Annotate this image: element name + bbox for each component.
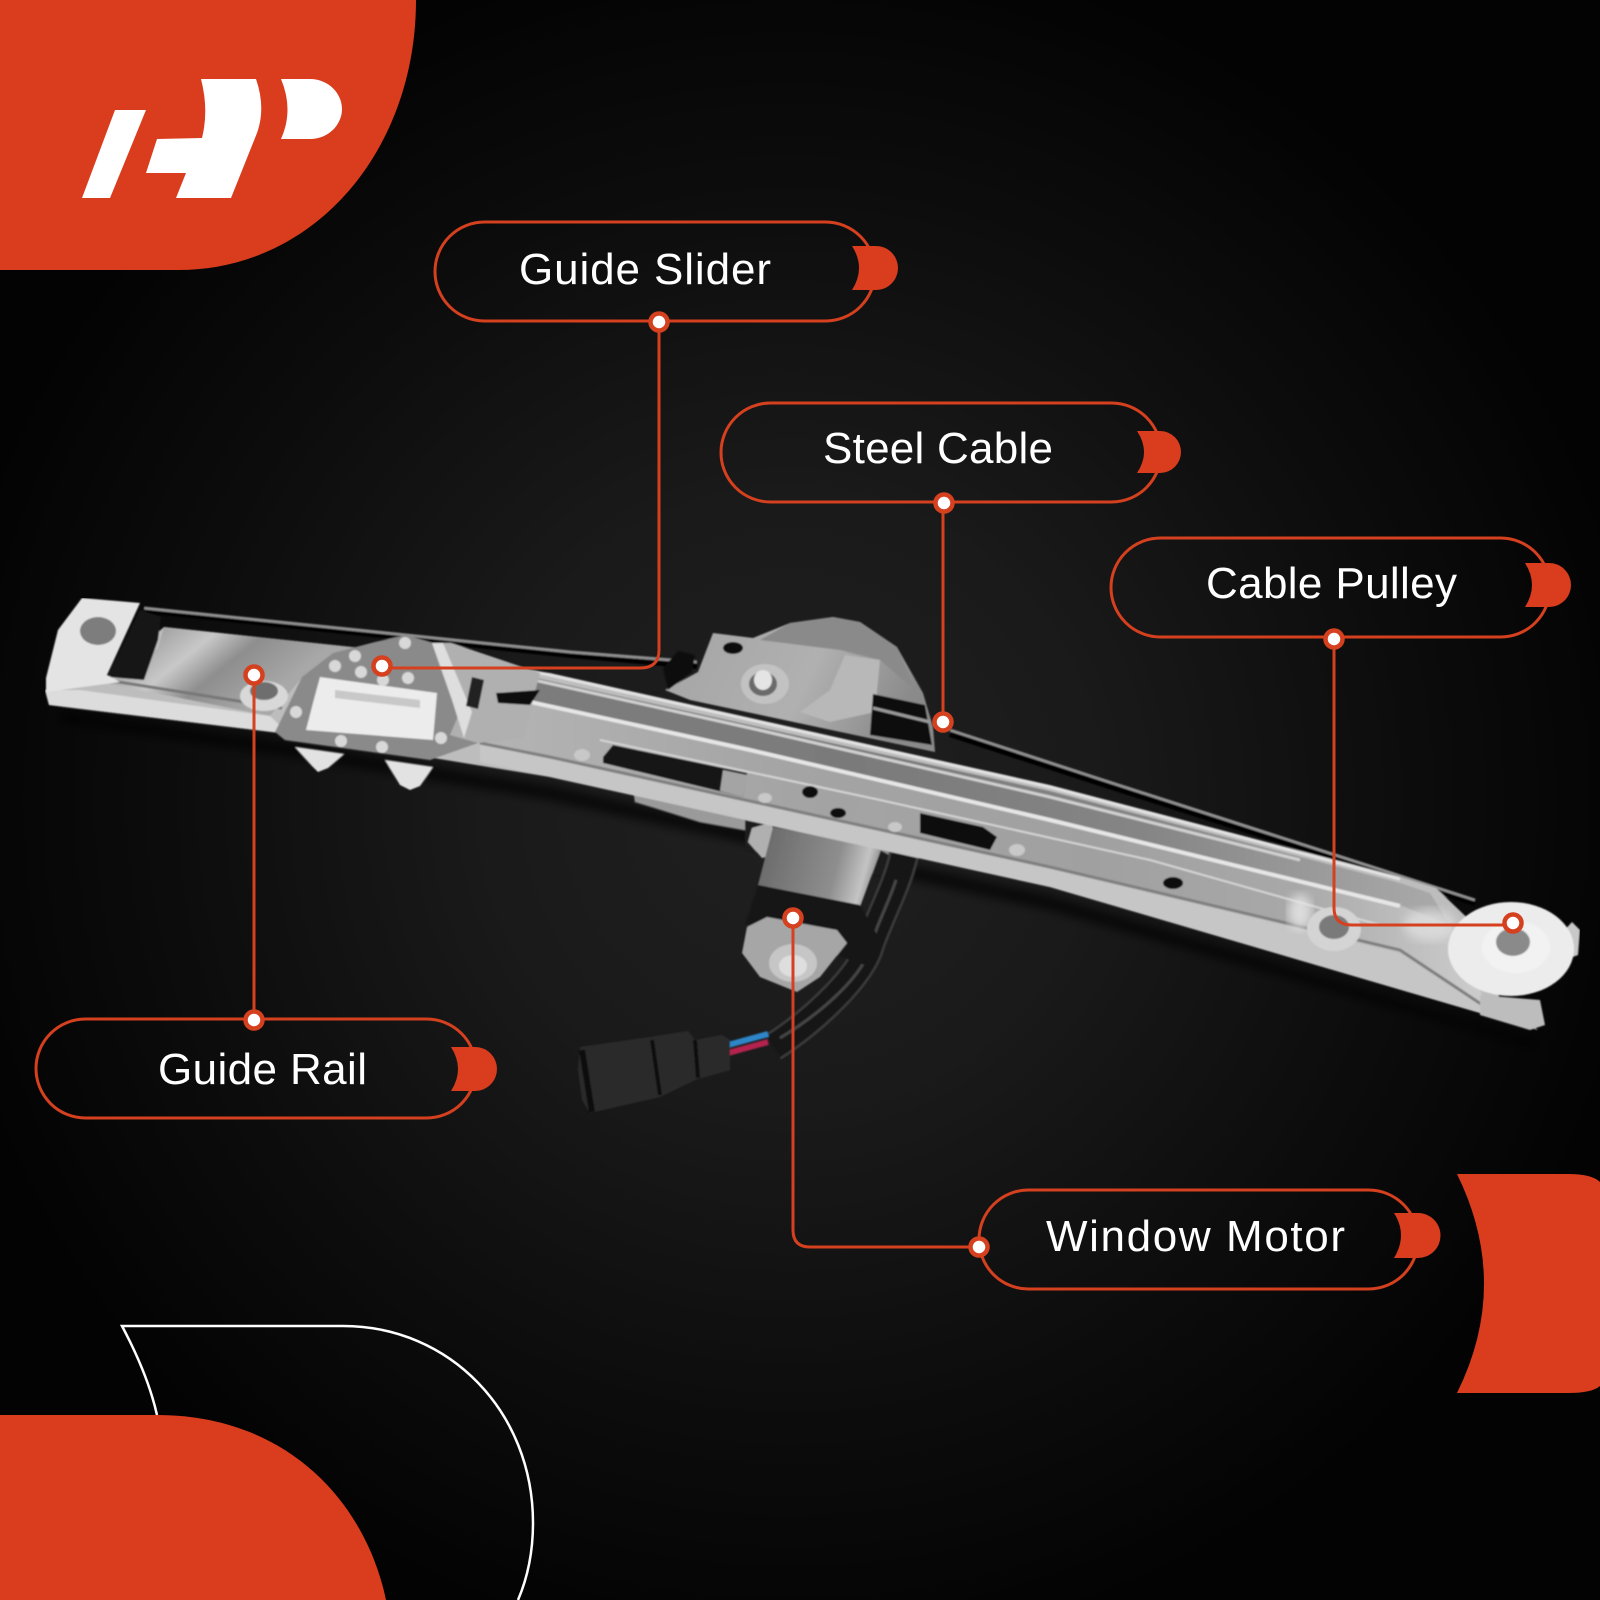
dot: target (246, 666, 262, 684)
dot: target (1504, 914, 1522, 932)
corner shape: top-left logo panel (0, 0, 416, 270)
dot: top (650, 314, 668, 330)
connector wires (728, 1034, 768, 1053)
label: Cable Pulley (1206, 559, 1457, 608)
label: Window Motor (1046, 1212, 1345, 1261)
callout: Cable Pulley (1111, 538, 1571, 932)
bolts (240, 681, 1361, 951)
tab (1525, 563, 1571, 607)
shadow under rail (60, 712, 1540, 1050)
pill (979, 1190, 1418, 1289)
white clip (306, 677, 437, 740)
guide rail (45, 627, 1538, 1030)
label: Steel Cable (823, 424, 1053, 473)
rail channel (480, 666, 1450, 925)
callout: Window Motor (784, 910, 1440, 1289)
leader line (793, 918, 979, 1247)
corner shape: right crescent (1457, 1174, 1600, 1393)
dot: target (374, 658, 390, 674)
dot: target (784, 910, 802, 926)
teeth (295, 747, 433, 790)
pill (36, 1019, 476, 1118)
logo: A1 mark (82, 79, 342, 198)
pill (1111, 538, 1550, 637)
pill (435, 222, 875, 321)
leader line (252, 675, 256, 1020)
cable pulley (1448, 902, 1580, 1030)
gear housing below rail (633, 790, 925, 880)
slot (466, 677, 484, 709)
callout: Steel Cable (721, 403, 1181, 730)
left lower band (45, 690, 290, 735)
slot: right (920, 813, 997, 850)
pill (721, 403, 1161, 502)
leader line (1334, 639, 1512, 925)
tabs (720, 770, 886, 828)
motor cable (773, 850, 905, 1047)
tab (451, 1047, 497, 1091)
dot: top (1326, 630, 1342, 648)
callout: Guide Slider (374, 222, 898, 674)
connector plug (578, 1031, 730, 1113)
label: Guide Rail (158, 1045, 367, 1094)
plate rivets (290, 637, 447, 753)
tab (852, 246, 898, 290)
dot: bottom (246, 1012, 262, 1028)
tab (1394, 1213, 1440, 1258)
leader line (382, 323, 659, 668)
holes (802, 786, 1183, 889)
rail body (480, 679, 1490, 1012)
corner shape: bottom-left panel (0, 1415, 386, 1600)
dot: left (970, 1238, 988, 1256)
end highlight (1288, 894, 1312, 930)
dot: top (936, 494, 952, 512)
label: Guide Slider (519, 245, 771, 294)
dot: target (934, 714, 952, 730)
gear plate (663, 617, 935, 752)
tab (1137, 431, 1181, 473)
motor housing (742, 822, 905, 1047)
left plate section (110, 627, 361, 716)
leader line (942, 503, 944, 722)
product: window regulator (45, 598, 1580, 1113)
corner outline: bottom-left white curve (122, 1326, 533, 1600)
highlights (480, 661, 1400, 879)
callout: Guide Rail (36, 666, 497, 1118)
slot: left (603, 745, 747, 797)
rail silhouette (45, 627, 1538, 1030)
steel cable: upper run (144, 608, 1475, 903)
guide slider plate (275, 635, 540, 790)
lower cable left (75, 675, 282, 708)
lower rail band (480, 744, 1538, 1030)
left end block (46, 598, 161, 692)
